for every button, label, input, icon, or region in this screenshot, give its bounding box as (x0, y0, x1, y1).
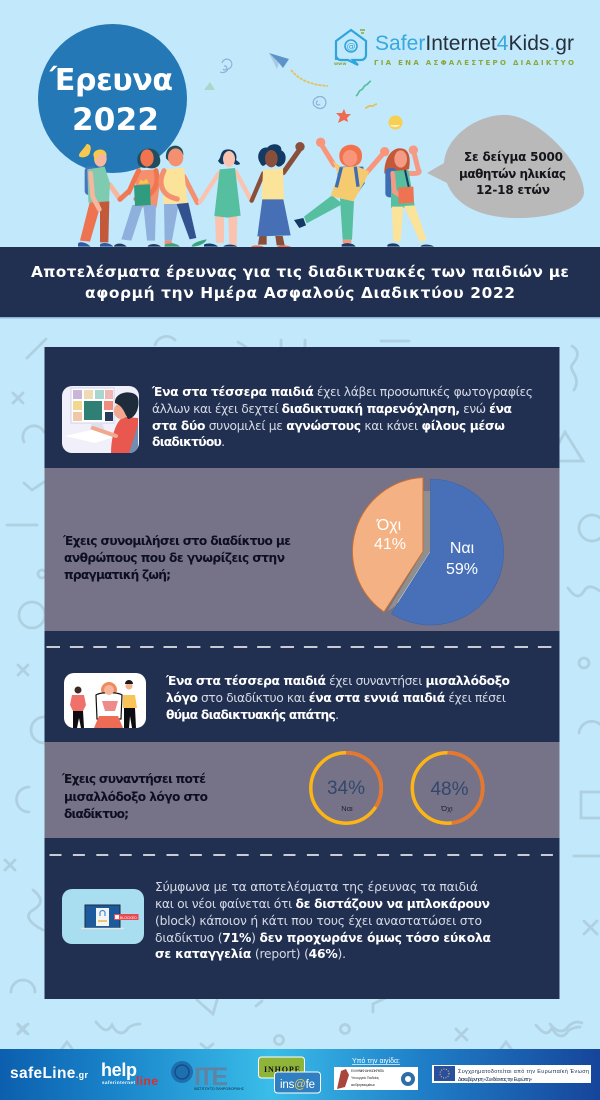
logo: INHOPE and insafe: ins@fe (280, 1079, 315, 1091)
text: first finding: διαδικτύου. (152, 435, 225, 449)
group of children waving (251, 138, 434, 247)
pie chart: 59% yes, 41% no: Όχι (376, 517, 402, 534)
speech bubble: sample: Σε δείγμα 5000 (464, 150, 563, 164)
logo: under the auspices of ministry: ΕΛΛΗΝΙΚΗ ΔΗΜΟΚΡΑΤΙΑ (351, 1069, 385, 1073)
text: third finding: Σύμφωνα με τα αποτελέσματα της έρευνας τα παιδιά (155, 880, 478, 894)
logo: EU co-funding note (432, 1065, 591, 1083)
logo: INHOPE and insafe: INHOPE (264, 1065, 300, 1074)
survey title circle: 2022 (72, 102, 159, 138)
third finding section (62, 880, 491, 961)
logo: helpline: line (136, 1074, 158, 1088)
child 2 (114, 148, 161, 247)
banner heading: Αποτελέσματα έρευνας για τις διαδικτυακές των παιδιών με (31, 263, 569, 281)
question text: talking to strangers: Έχεις συνομιλήσει στο διαδίκτυο με (62, 534, 291, 548)
logo: ITE (171, 1061, 245, 1091)
pie chart: 59% yes, 41% no: Ναι (450, 540, 475, 557)
ring chart: 48% no (412, 753, 483, 823)
pie chart: 59% yes, 41% no (352, 478, 504, 625)
icon: laptop with blocked label (62, 889, 144, 944)
logo: safeline: safeLine.gr (10, 1065, 88, 1082)
logo: under the auspices of ministry: Υπό την αιγίδα: (352, 1057, 400, 1065)
speech bubble: sample (427, 115, 584, 218)
pie chart: 59% yes, 41% no: 59% (446, 561, 478, 578)
text: third finding (155, 880, 491, 961)
child 4 (204, 149, 241, 247)
survey title circle (38, 24, 187, 173)
child 3 (161, 146, 207, 247)
question text: hate speech (61, 772, 208, 821)
question text: hate speech: μισαλλόδοξο λόγο στο (64, 790, 208, 804)
icon: three young people talking (64, 673, 146, 728)
question text: talking to strangers: πραγματική ζωή; (64, 568, 171, 582)
banner heading: αφορμή την Ημέρα Ασφαλούς Διαδικτύου 2022 (85, 284, 515, 302)
text: first finding: στα δύο συνομιλεί με αγνώστους και κάνει φίλους μέσω (152, 419, 505, 433)
paper plane and trail (269, 53, 328, 86)
question text: hate speech: Έχεις συναντήσει ποτέ (61, 772, 206, 786)
banner heading (0, 247, 600, 318)
logo: SaferInternet4Kids: @ (346, 42, 356, 52)
speech bubble: sample: μαθητών ηλικίας (459, 167, 566, 181)
child 7 (384, 145, 434, 247)
ring chart: 34% yes: 34% (327, 778, 365, 799)
text: second finding (165, 674, 510, 722)
main results panel (44, 347, 560, 999)
logo: SaferInternet4Kids: www (334, 62, 346, 67)
text: second finding: θύμα διαδικτυακής απάτης. (166, 708, 339, 722)
question text: talking to strangers (62, 534, 291, 582)
child 1 (78, 144, 113, 247)
logo: SaferInternet4Kids: SaferInternet4Kids.gr (375, 32, 574, 55)
icon: laptop with blocked label: BLOCKED (120, 916, 137, 920)
floating doodles (204, 59, 402, 130)
speech bubble: sample: 12-18 ετών (476, 183, 550, 197)
child 6 (294, 138, 389, 247)
ring chart: 48% no: Όχι (440, 804, 453, 813)
text: second finding: Ένα στα τέσσερα παιδιά έχει συναντήσει μισαλλόδοξο (165, 674, 510, 688)
second finding section (64, 673, 510, 728)
text: third finding: (block) κάποιον ή κάτι που τους έχει αναστατώσει στο (155, 914, 482, 928)
logo: INHOPE and insafe (258, 1057, 320, 1093)
text: first finding: άλλων και έχει δεχτεί διαδικτυακή παρενόχληση, ενώ ένα (152, 402, 512, 416)
group of children holding hands (78, 144, 251, 247)
logo: ITE: ITE (194, 1063, 228, 1091)
logo: SaferInternet4Kids (334, 30, 574, 67)
first finding section (62, 385, 533, 453)
survey title circle: Έρευνα (49, 63, 173, 98)
logo: under the auspices of ministry (334, 1057, 418, 1090)
text: third finding: σε καταγγελία (report) (46%). (155, 947, 346, 961)
logo: under the auspices of ministry: και Θρησκευμάτων (351, 1083, 375, 1087)
logo: helpline: help (101, 1060, 137, 1080)
logo: helpline: saferinternet (102, 1080, 136, 1085)
pie chart: 59% yes, 41% no: 41% (374, 536, 406, 553)
footer partner logos (0, 1049, 600, 1100)
logo: EU co-funding note: Συγχρηματοδοτείται από την Ευρωπαϊκή Ένωση (458, 1068, 589, 1075)
text: third finding: και οι νέοι φαίνεται ότι δε διστάζουν να μπλοκάρουν (155, 897, 490, 911)
question band with pie chart (44, 468, 560, 631)
text: first finding: Ένα στα τέσσερα παιδιά έχει λάβει προσωπικές φωτογραφίες (151, 385, 533, 399)
ring chart: 34% yes: Ναι (341, 804, 353, 813)
text: third finding: διαδίκτυο (71%) δεν προχωράνε όμως τόσο εύκολα (155, 931, 491, 945)
logo: SaferInternet4Kids: ΓΙΑ ΕΝΑ ΑΣΦΑΛΕΣΤΕΡΟ ΔΙΑΔΙΚΤΥΟ (374, 59, 574, 67)
logo: EU co-funding note: Διακυβέρνηση «Συνδέοντας την Ευρώπη» (458, 1076, 532, 1083)
icon: online class on computer (62, 386, 139, 453)
question text: hate speech: διαδίκτυο; (64, 807, 129, 821)
logo: helpline (101, 1060, 158, 1088)
question text: talking to strangers: ανθρώπους που δε γνωρίζεις στην (64, 551, 285, 565)
text: first finding (151, 385, 533, 449)
logo: ITE: ΙΝΣΤΙΤΟΥΤΟ ΠΛΗΡΟΦΟΡΙΚΗΣ (194, 1087, 245, 1091)
ring chart: 48% no: 48% (430, 779, 469, 800)
child 5 (251, 142, 305, 247)
ring chart: 34% yes (311, 753, 381, 823)
logo: under the auspices of ministry: Υπουργείο Παιδείας (351, 1076, 379, 1080)
question band with ring charts (44, 742, 560, 838)
text: second finding: λόγο στο διαδίκτυο και ένα στα εννιά παιδιά έχει πέσει (166, 691, 506, 705)
